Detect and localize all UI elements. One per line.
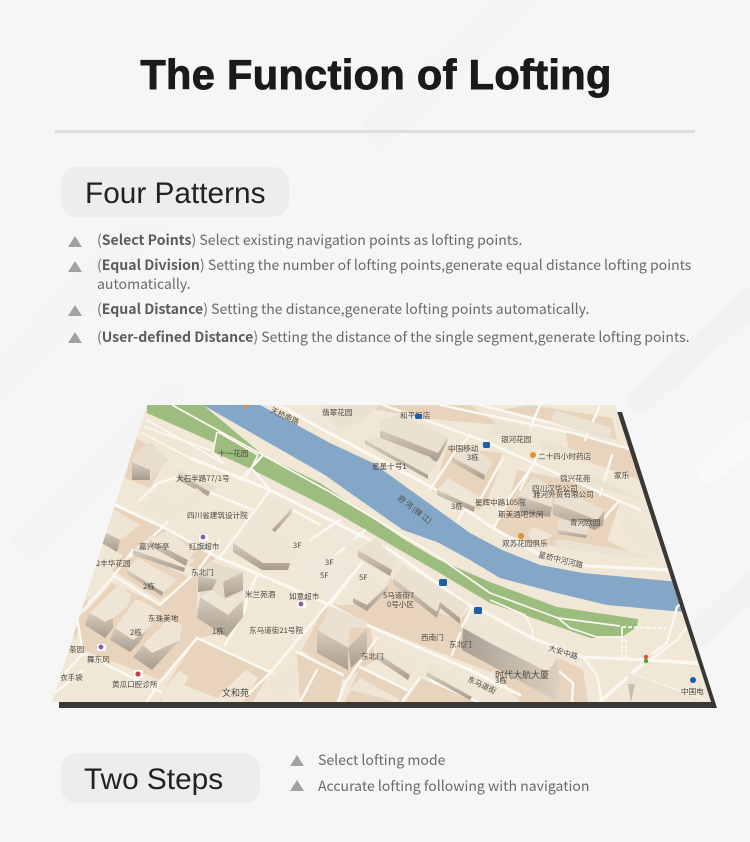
map labels: 2栋	[130, 627, 142, 638]
pattern: Equal Distance: (Equal Distance) Setting the distance,generate lofting points automatically.	[97, 299, 589, 319]
map labels: 3栋	[451, 501, 463, 512]
map labels: 雅河外贸有限公司	[533, 489, 594, 500]
map labels: 翡翠花园	[322, 407, 352, 418]
perspective map	[52, 405, 717, 708]
map labels: 5F	[320, 570, 328, 581]
map labels: 西南门	[421, 632, 444, 643]
map labels	[60, 405, 704, 699]
map labels: 二十四小时药店	[538, 451, 592, 462]
map labels: 3栋	[495, 675, 507, 686]
map labels: 2栋	[143, 581, 155, 592]
park paths	[172, 405, 667, 658]
buildings	[85, 405, 711, 702]
map labels: 家乐	[614, 470, 630, 481]
map labels: 中国移动	[448, 443, 479, 454]
icon: triangle bullet A	[290, 755, 304, 766]
pattern: Equal Division	[97, 255, 691, 294]
map frame	[59, 412, 717, 708]
map pois	[97, 402, 696, 683]
map labels: 中国电	[681, 686, 704, 697]
river	[203, 405, 690, 612]
map labels: 东珠美地	[148, 613, 179, 624]
map labels: 米兰苑酒	[245, 589, 276, 600]
map labels: 0号小区	[387, 599, 414, 610]
icon: triangle bullet 4	[68, 332, 82, 343]
map labels: 红旗超市	[189, 541, 220, 552]
map labels: 东北门	[191, 567, 214, 578]
heading pill: Four Patterns	[61, 167, 289, 217]
map labels: 天桥南路	[269, 405, 301, 428]
map labels: 文和苑	[222, 686, 249, 699]
map labels: 星桥中河河路	[537, 549, 585, 571]
map labels: 双苏花园俱乐	[502, 538, 548, 549]
pattern: Equal Division: (Equal Division) Setting the number of lofting points,generate equal distance lofting points	[97, 255, 691, 275]
pattern: User-defined Distance: (User-defined Distance) Setting the distance of the single segment,generate lofting points.	[97, 327, 690, 347]
icon: triangle bullet 1	[68, 236, 82, 247]
map labels: 衣手袋	[60, 672, 83, 683]
map labels: 十一花园	[218, 448, 248, 459]
map labels: 东马道街	[466, 674, 498, 697]
step: accurate lofting: Accurate lofting following with navigation	[318, 776, 590, 796]
map labels: 斯美酒吧休闲	[498, 509, 544, 520]
icon: triangle bullet 3	[68, 305, 82, 316]
map labels: 东马道街21号院	[249, 625, 303, 636]
map labels: 1栋	[212, 626, 224, 637]
map labels: 大石半路77/1号	[176, 473, 230, 484]
map labels: 5马道街7	[383, 590, 414, 601]
map labels: 茶园	[69, 644, 84, 655]
heading pill: Two Steps: Two Steps	[84, 763, 223, 796]
map labels: 如意超市	[289, 591, 320, 602]
map labels: 2丰华花园	[96, 558, 131, 569]
map labels: 锦兴花苑	[560, 473, 591, 484]
map labels: 3F	[293, 540, 301, 551]
icon: triangle bullet 2	[68, 261, 82, 272]
step: select mode: Select lofting mode	[318, 750, 445, 770]
map labels: 舞东风	[87, 654, 110, 665]
map labels: 时代大航大厦	[495, 668, 549, 681]
map labels: 银河花园	[501, 434, 531, 445]
pattern list	[68, 230, 691, 347]
icon: triangle bullet B	[290, 780, 304, 791]
heading pill: Two Steps	[61, 753, 260, 803]
pattern: Select Points: (Select Points) Select existing navigation points as lofting points.	[97, 230, 522, 250]
map roads	[50, 400, 720, 712]
heading pill: Four Patterns: Four Patterns	[85, 177, 266, 210]
map labels: 东北门	[449, 639, 472, 650]
map labels: 大安中路	[547, 642, 580, 662]
map labels: 四川省建筑设计院	[187, 510, 248, 521]
map labels: 嘉兴华亭	[139, 541, 170, 552]
green belt	[147, 405, 638, 638]
map plots	[70, 405, 640, 712]
map labels: 5F	[359, 572, 367, 583]
map labels: 3栋	[467, 452, 479, 463]
river label: 府 河 (锦 江)	[395, 493, 434, 526]
map labels: 四川汉华公司	[532, 483, 578, 494]
map labels: 星星十号1	[372, 461, 407, 472]
map labels: 青河欧园	[570, 517, 600, 528]
title: The Function of Lofting	[140, 51, 612, 98]
map labels: 星辉中路105院	[475, 497, 526, 508]
map labels: 和平饭店	[400, 410, 431, 421]
pattern: Equal Division: automatically.	[97, 274, 191, 294]
map labels: 黄瓜口腔诊所	[112, 679, 158, 690]
map labels: 3F	[325, 557, 333, 568]
map labels: 东北门	[361, 651, 384, 662]
